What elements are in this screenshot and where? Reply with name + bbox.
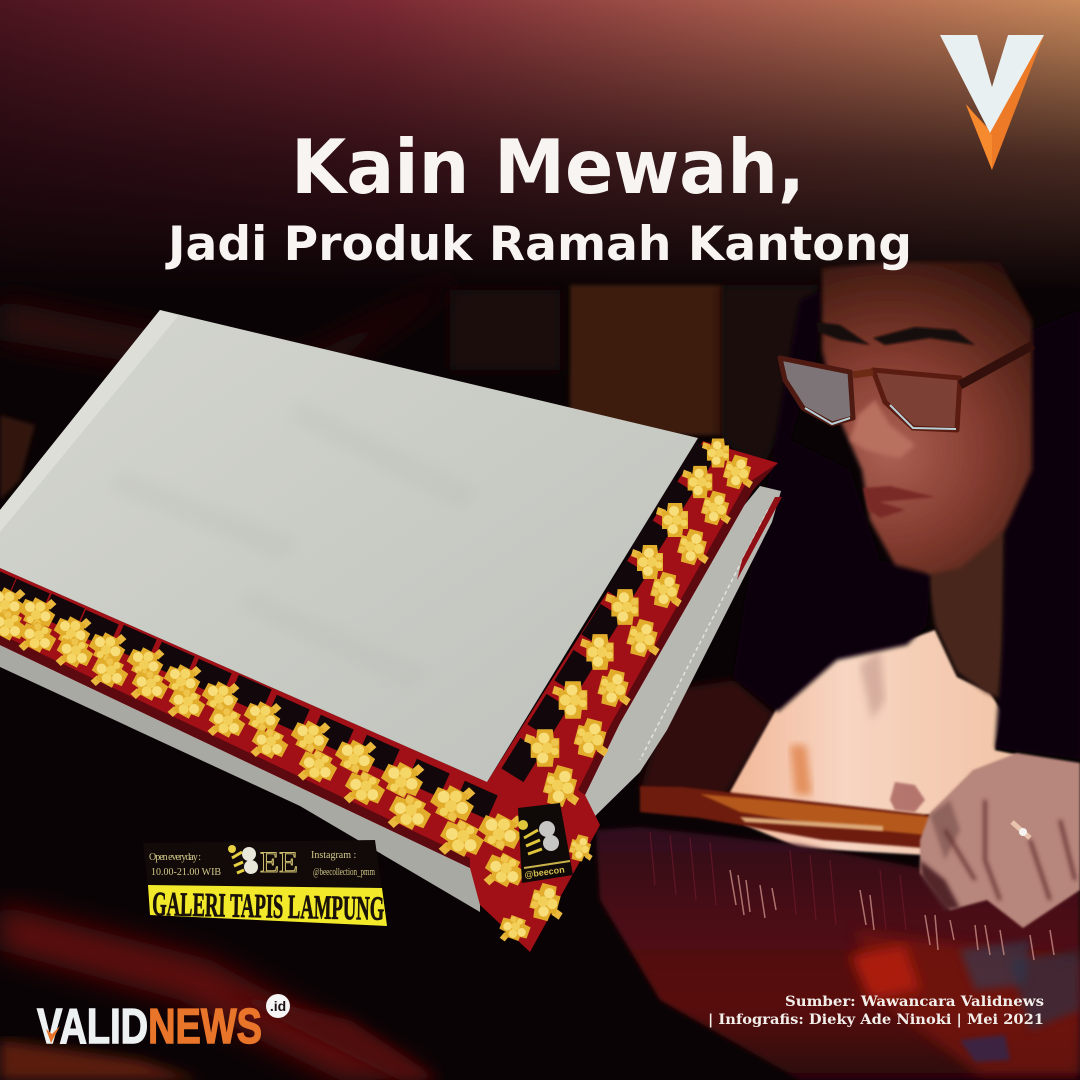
photo: woman weaving <box>596 262 1080 1080</box>
wordmark: VALIDNEWS <box>37 1000 262 1054</box>
neck <box>925 530 1005 700</box>
credit line 2: | Infografis: Dieky Ade Ninoki | Mei 2021 <box>708 1012 1044 1028</box>
back grey fabric lower <box>0 640 480 912</box>
loom threads <box>596 827 1080 1080</box>
title <box>165 123 912 272</box>
eyebrows <box>816 322 975 345</box>
title line 1: Kain Mewah, <box>291 123 805 211</box>
dark maroon behind arm <box>640 680 775 795</box>
sticker bee logo: EE <box>260 846 298 879</box>
bee label tag: @beecon <box>524 864 565 880</box>
hand with ring <box>920 753 1080 928</box>
sticker instagram: @beecollection_pmm <box>313 867 375 878</box>
sticker bee logo <box>228 845 298 879</box>
white cloth panel <box>0 310 698 782</box>
sticker opening hours: 10.00-21.00 WIB <box>151 867 221 878</box>
hair <box>733 290 1080 760</box>
black blocks along right band <box>501 441 718 782</box>
black blocks along lower band <box>0 564 498 819</box>
gold motifs along lower band <box>0 578 529 897</box>
sticker opening hours: Open everyday : <box>149 852 201 863</box>
source credits <box>708 994 1044 1028</box>
brand mark: V logo <box>940 35 1044 170</box>
wooden bar <box>640 786 930 848</box>
back grey fabric right <box>585 486 781 826</box>
glasses <box>780 345 1033 430</box>
sticker: Galeri Tapis Lampung <box>143 840 387 928</box>
red woven band <box>0 441 778 952</box>
face <box>822 262 1032 574</box>
.id badge <box>266 994 290 1018</box>
sticker banner text: GALERI TAPIS LAMPUNG <box>152 886 385 928</box>
logo: Validnews.id <box>37 994 290 1054</box>
bee label tag <box>518 803 573 883</box>
nose highlight <box>850 400 915 458</box>
product: Tapis fabric pouch <box>0 310 782 952</box>
credit line 1: Sumber: Wawancara Validnews <box>785 994 1044 1010</box>
.id badge: .id <box>270 998 286 1014</box>
t-shirt <box>730 630 1018 855</box>
title line 2: Jadi Produk Ramah Kantong <box>165 217 912 272</box>
sticker instagram: Instagram : <box>311 850 356 861</box>
gold motifs along right band <box>496 439 759 948</box>
lips <box>863 486 935 518</box>
